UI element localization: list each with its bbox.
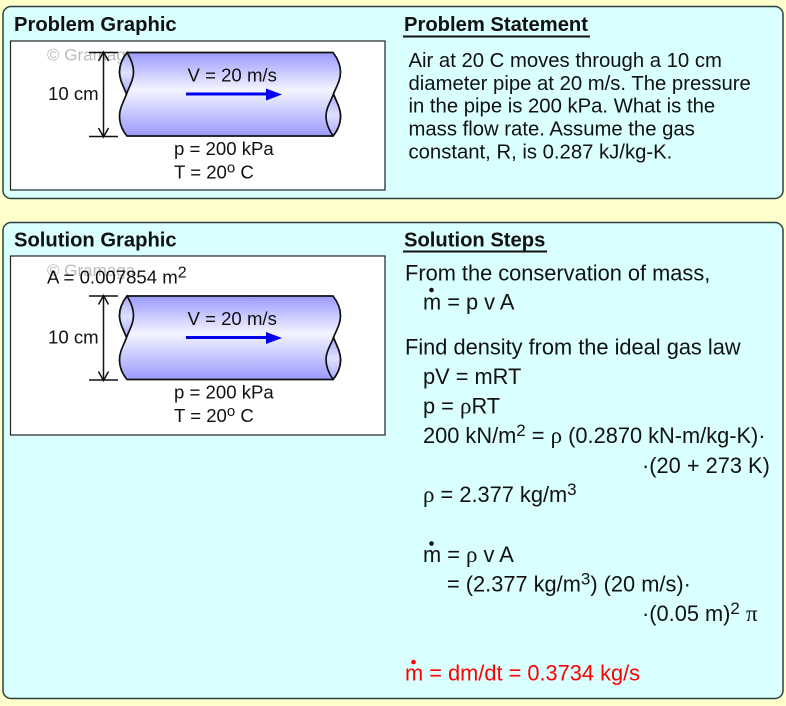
watermark: © Gramaga bbox=[47, 46, 136, 64]
flow arrow bbox=[186, 332, 282, 344]
pipe bbox=[120, 52, 340, 136]
solution steps text: 2 bbox=[516, 421, 526, 440]
problem statement text: in the pipe is 200 kPa. What is the bbox=[408, 96, 715, 118]
temperature label: o bbox=[227, 160, 235, 176]
temperature label: T = 20 bbox=[174, 405, 227, 426]
problem statement text: Air at 20 C moves through a 10 cm bbox=[408, 50, 722, 72]
temperature label: C bbox=[235, 162, 254, 182]
velocity label: V = 20 m/s bbox=[188, 64, 277, 86]
dimension: 10 cm bbox=[48, 52, 118, 137]
solution steps text: = bbox=[526, 423, 551, 448]
solution steps text: Find density from the ideal gas law bbox=[405, 334, 741, 360]
pipe bbox=[120, 296, 340, 380]
panel: problem bbox=[3, 6, 783, 198]
problem statement text: diameter pipe at 20 m/s. The pressure bbox=[408, 73, 751, 95]
heading: solution graphic: Solution Graphic bbox=[14, 230, 177, 252]
problem statement text bbox=[408, 50, 751, 164]
solution steps text: 2 bbox=[730, 599, 740, 618]
dimension: 10 cm: 10 cm bbox=[48, 326, 99, 348]
solution steps text: = (2.377 kg/m bbox=[447, 572, 581, 596]
solution steps text: m = p v A bbox=[423, 290, 515, 314]
area label: 2 bbox=[178, 264, 187, 282]
temperature label: T = 20 bbox=[174, 162, 227, 182]
dimension: 10 cm bbox=[48, 296, 118, 380]
problem graphic box bbox=[10, 41, 385, 190]
velocity label: V = 20 m/s bbox=[188, 308, 277, 329]
solution steps text: 200 kN/m bbox=[423, 423, 516, 448]
solution steps text: 3 bbox=[581, 570, 590, 588]
solution steps text: ·(20 + 273 K) bbox=[642, 453, 770, 478]
problem statement text: constant, R, is 0.287 kJ/kg-K. bbox=[408, 142, 672, 164]
solution steps text: m = ρ v A bbox=[423, 542, 514, 567]
watermark: © Gramaga bbox=[47, 261, 136, 280]
solution steps text: ρ = 2.377 kg/m bbox=[423, 482, 567, 507]
solution steps text: ) (20 m/s)· bbox=[590, 572, 691, 596]
solution steps text bbox=[405, 260, 770, 626]
pressure label: p = 200 kPa bbox=[174, 382, 274, 402]
problem statement text: mass flow rate. Assume the gas bbox=[408, 118, 695, 140]
temperature label: C bbox=[235, 405, 254, 426]
area label: A = 0.007854 m bbox=[47, 266, 178, 288]
solution steps text: From the conservation of mass, bbox=[405, 260, 710, 286]
final answer: m = dm/dt = 0.3734 kg/s bbox=[405, 660, 640, 686]
solution steps text: p = ρRT bbox=[423, 394, 500, 418]
pressure label: p = 200 kPa bbox=[174, 138, 274, 159]
solution steps text: pV = mRT bbox=[423, 364, 521, 389]
solution steps text: ·(0.05 m) bbox=[642, 601, 730, 626]
solution steps text: ρ (0.2870 kN-m/kg-K)· bbox=[551, 423, 766, 448]
heading: solution steps: Solution Steps bbox=[404, 230, 545, 252]
dimension: 10 cm: 10 cm bbox=[48, 83, 99, 104]
panel: solution bbox=[3, 222, 783, 698]
solution graphic box bbox=[10, 256, 385, 435]
flow arrow bbox=[186, 88, 282, 100]
heading: problem statement: Problem Statement bbox=[404, 14, 588, 36]
temperature label: o bbox=[227, 403, 235, 420]
solution steps text: 3 bbox=[567, 480, 577, 499]
solution steps text: π bbox=[746, 601, 758, 626]
heading: problem graphic: Problem Graphic bbox=[14, 14, 177, 36]
